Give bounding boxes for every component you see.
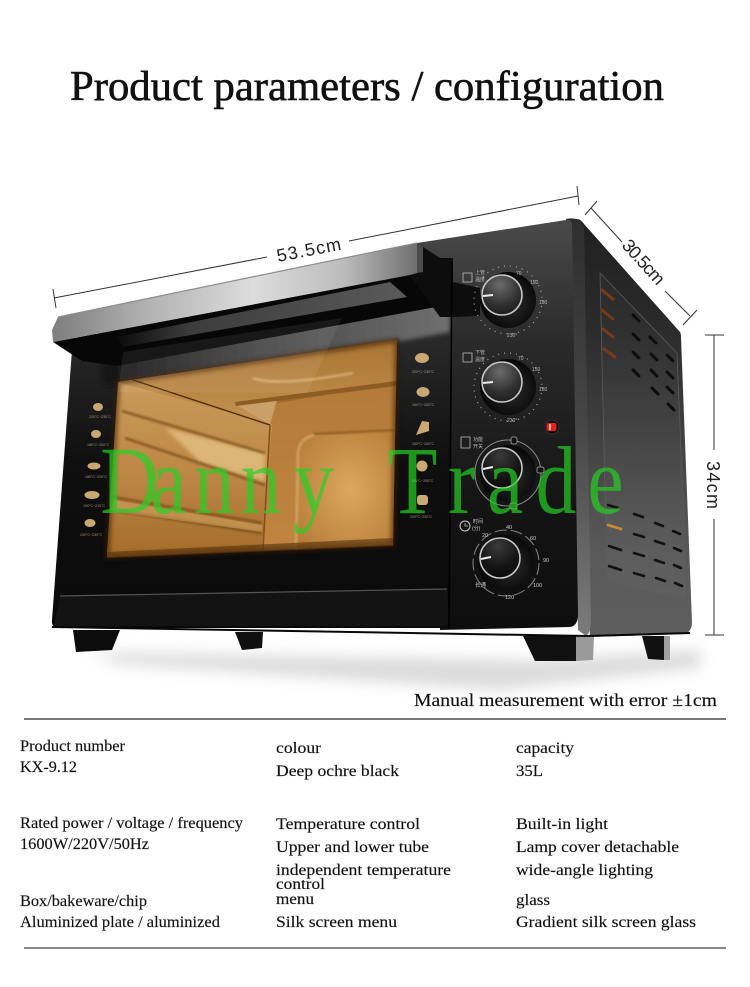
timer label: 时间 (473, 518, 483, 525)
knob: lower heat: 150 (532, 367, 541, 373)
knob: timer: 60 (530, 536, 536, 542)
knob: upper heat (474, 266, 548, 339)
spec column: capacity, light, glass: glass (516, 892, 550, 909)
right menu icons (410, 353, 435, 519)
spec column: capacity, light, glass: Gradient silk screen glass (516, 914, 696, 931)
right menu icons: 200°C~230°C (412, 370, 435, 374)
spec column: colour, temperature, menu (276, 740, 451, 931)
spec column: colour, temperature, menu: Deep ochre black (276, 763, 399, 780)
bottom divider (24, 947, 726, 949)
oven base edge (52, 627, 690, 636)
title: Product parameters / configuration (70, 64, 664, 110)
spec column: capacity, light, glass (516, 740, 696, 931)
upper vent slots (633, 315, 674, 410)
spec column: model, power, materials: Aluminized plate / aluminized (20, 914, 220, 931)
dimension: depth 30.5cm (585, 201, 697, 325)
spec column: capacity, light, glass: wide-angle lighting (516, 862, 653, 879)
knob: timer: 100 (533, 583, 542, 589)
left menu icons: 180°C~200°C (85, 475, 108, 479)
function label (461, 436, 483, 450)
right menu icons: 180°C~200°C (412, 442, 435, 446)
upper heat label: 温度 (475, 276, 485, 283)
lower vent slots (608, 505, 682, 586)
spec column: colour, temperature, menu: menu (276, 891, 314, 908)
timer label: (分) (472, 525, 481, 532)
timer label (460, 518, 483, 532)
spec column: colour, temperature, menu: Upper and lower tube (276, 839, 429, 856)
window embossed panel (296, 431, 395, 549)
dimension: depth 30.5cm: 30.5cm (618, 235, 669, 289)
front corner strip (566, 218, 591, 636)
side vent panel (600, 273, 687, 600)
dimension: height 34cm: 34cm (703, 461, 723, 509)
spec column: model, power, materials: KX-9.12 (20, 759, 77, 776)
spec column: model, power, materials: Product number (20, 738, 126, 755)
measurement note: Manual measurement with error ±1cm (414, 690, 717, 710)
knob: lower heat: 70 (518, 356, 524, 362)
left menu icons: 200°C~230°C (89, 415, 112, 419)
knob: lower heat: 180 (539, 387, 548, 393)
right menu icons: 180°C~200°C (412, 403, 435, 407)
spec column: colour, temperature, menu: Temperature control (276, 816, 421, 833)
spec column: model, power, materials: Rated power / voltage / frequency (20, 815, 243, 832)
spec column: capacity, light, glass: Lamp cover detachable (516, 839, 679, 856)
function label: 功能 (473, 436, 483, 443)
dimension: height 34cm (703, 335, 724, 635)
right menu icons: 200°C~230°C (410, 515, 433, 519)
lower heat label: 温度 (475, 356, 485, 363)
handle underside (53, 243, 480, 366)
knob: upper heat: 70 (516, 271, 522, 277)
door top glass band (100, 300, 450, 386)
glass reflection (118, 318, 342, 393)
spec column: capacity, light, glass: 35L (516, 763, 543, 780)
spec column: colour, temperature, menu: Silk screen menu (276, 914, 397, 931)
spec column: capacity, light, glass: Built-in light (516, 816, 609, 833)
knob: timer: 40 (506, 525, 512, 531)
knob: function (475, 437, 544, 509)
left menu icons: 200°C~230°C (80, 533, 103, 537)
spec column: model, power, materials (20, 738, 243, 931)
upper heat label: 上管 (475, 269, 485, 276)
oven feet (73, 630, 670, 661)
knob: upper heat: 230° (507, 333, 517, 339)
knob: timer: 120 (505, 595, 514, 601)
knob: timer: 20 (482, 533, 488, 539)
left menu icons: 190°C~210°C (83, 504, 106, 508)
indicator light (545, 420, 559, 434)
stainless handle (52, 243, 417, 342)
oven side wall (575, 219, 692, 637)
door bottom strip (54, 589, 449, 626)
window left wall (107, 382, 272, 557)
oven window (107, 340, 397, 558)
lower heat label: 下管 (475, 349, 485, 356)
left menu icons (80, 403, 112, 537)
spec column: model, power, materials: Box/bakeware/chip (20, 893, 147, 910)
knob: lower heat (474, 353, 548, 424)
lower heat label (463, 349, 485, 363)
knob: timer: 90 (543, 558, 549, 564)
oven (52, 218, 692, 661)
upper heat label (463, 269, 485, 283)
spec column: colour, temperature, menu: colour (276, 740, 322, 757)
function label: 开关 (473, 443, 483, 450)
window ceiling (118, 340, 397, 424)
knob: timer: 长通 (475, 581, 487, 589)
knob: timer (473, 525, 549, 601)
knob: upper heat: 150 (530, 280, 539, 286)
left menu icons: 180°C~200°C (87, 443, 110, 447)
floor shadow (90, 650, 700, 690)
top divider (24, 718, 726, 720)
door (52, 262, 452, 628)
knob: lower heat: 230° (507, 418, 517, 424)
dimension: width 53.5cm (53, 186, 579, 308)
window back wall (263, 383, 396, 550)
spec column: colour, temperature, menu: independent temperature (276, 862, 451, 879)
window edge vignette (107, 340, 397, 557)
watermark: Danny Trade (100, 429, 624, 535)
lit vent slots (602, 290, 615, 357)
control panel (417, 220, 578, 630)
knob: upper heat: 180 (539, 300, 548, 306)
spec column: colour, temperature, menu: control (276, 876, 326, 893)
right menu icons: 180°C~200°C (411, 479, 434, 483)
spec column: capacity, light, glass: capacity (516, 740, 574, 757)
dimension: width 53.5cm: 53.5cm (275, 234, 343, 266)
spec column: model, power, materials: 1600W/220V/50Hz (20, 836, 149, 853)
